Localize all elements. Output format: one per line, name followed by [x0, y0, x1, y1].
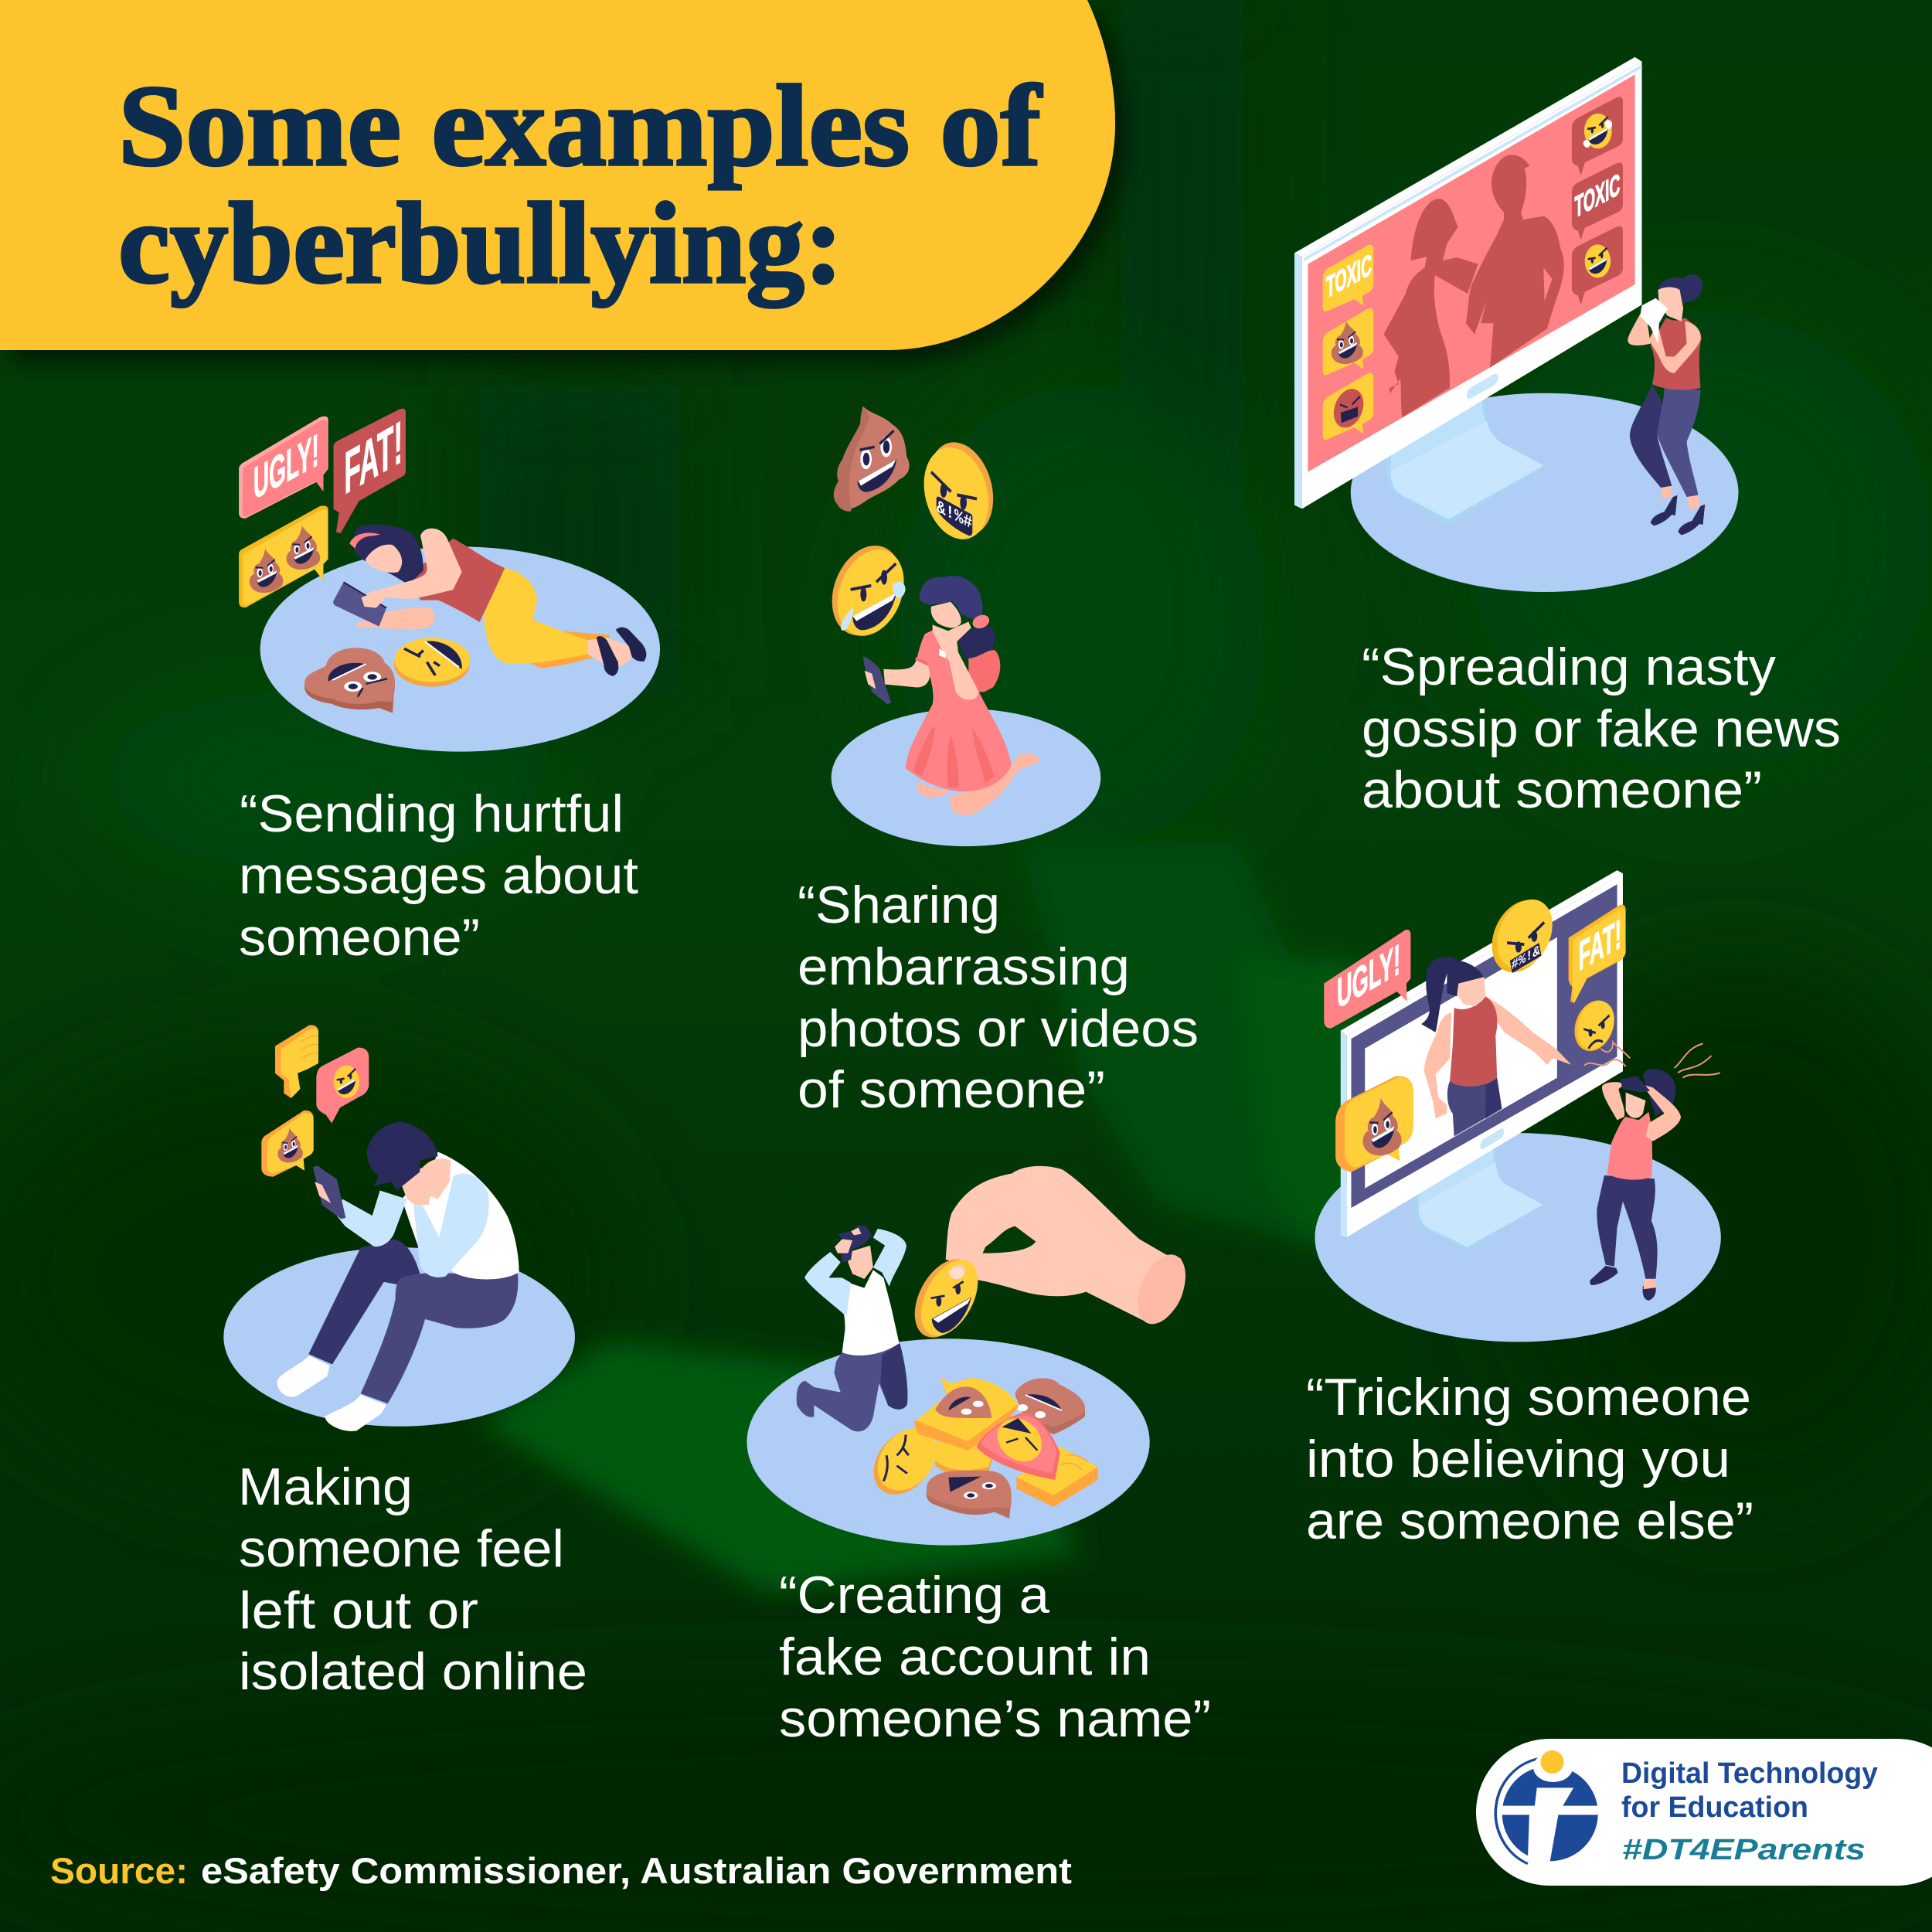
- logo text: #DT4EParents: [1622, 1834, 1866, 1866]
- illustration: tricking someone, monitor and woman: [1315, 870, 1721, 1342]
- emoji: angry coin with censored mouth: [912, 430, 1005, 552]
- caption: spreading gossip: gossip or fake news: [1362, 699, 1841, 758]
- emoji: laughing coin with tears: [818, 529, 917, 651]
- emoji: angry coin with censored mouth: [1480, 887, 1564, 985]
- pink emoji bubble: [316, 1048, 369, 1124]
- logo icon: [1495, 1750, 1598, 1864]
- emoji: angry face: [1566, 992, 1622, 1060]
- woman lying on floor: [333, 525, 646, 676]
- caption: embarrassing photos: of someone”: [798, 1060, 1105, 1119]
- logo text: for Education: [1621, 1791, 1808, 1824]
- kneeling man: [797, 1225, 907, 1431]
- emoji: poop: [834, 406, 910, 512]
- speech bubble: UGLY: [239, 417, 328, 519]
- title: cyberbullying:: [118, 179, 843, 308]
- emoji coin being held: [903, 1252, 989, 1345]
- caption: left out: someone feel: [239, 1519, 564, 1578]
- monitor stand: [1386, 393, 1543, 525]
- illustration: embarrassing photos, kneeling girl: [818, 406, 1100, 846]
- crying woman with tissue: [1628, 274, 1705, 535]
- left column speech bubbles: [1323, 245, 1373, 440]
- illustration: spreading gossip, large monitor: [1294, 57, 1739, 592]
- logo panel: [1476, 1739, 1932, 1886]
- caption: tricking someone: are someone else”: [1306, 1492, 1753, 1550]
- illustration: fake account, hand dropping emoji: [747, 1166, 1195, 1546]
- caption: fake account: [779, 1566, 1211, 1748]
- emoji on floor: poop: [304, 648, 395, 713]
- woman on screen pointing: [1421, 957, 1571, 1136]
- poop bubble: [261, 1111, 314, 1177]
- thumbs-down bubble: [275, 1025, 318, 1098]
- speech bubble: UGLY: UGLY!: [1337, 934, 1400, 1018]
- distressed woman: [1590, 1069, 1681, 1301]
- caption: tricking someone: into believing you: [1306, 1430, 1730, 1488]
- title banner: [0, 0, 1115, 350]
- caption: embarrassing photos: [798, 876, 1199, 1119]
- emoji on floor: laughing coin: [394, 638, 470, 687]
- caption: fake account: fake account in: [779, 1628, 1151, 1686]
- speech bubble: FAT: [334, 408, 406, 533]
- left column speech bubbles: TOXIC: [1326, 247, 1372, 305]
- caption: hurtful messages: someone”: [239, 908, 480, 967]
- speech bubble: UGLY: [1324, 930, 1410, 1029]
- caption: tricking someone: [1306, 1368, 1753, 1550]
- caption: fake account: someone’s name”: [779, 1689, 1211, 1748]
- caption: left out: [238, 1458, 587, 1701]
- caption: embarrassing photos: photos or videos: [798, 999, 1199, 1058]
- caption: fake account: “Creating a: [779, 1566, 1049, 1624]
- speech bubble: two poop emojis: [239, 505, 328, 607]
- monitor stand: [1414, 1143, 1543, 1251]
- caption: left out: isolated online: [239, 1642, 587, 1701]
- monitor with pink screen: [1294, 57, 1642, 509]
- source credit: eSafety Commissioner, Australian Government: [201, 1850, 1072, 1891]
- title: Some examples of: [118, 62, 1043, 190]
- illustration: hurtful messages, woman lying down: FAT!: [344, 408, 403, 508]
- caption: spreading gossip: [1362, 638, 1841, 819]
- caption: spreading gossip: about someone”: [1362, 760, 1762, 819]
- caption: hurtful messages: [239, 784, 638, 967]
- illustration: hurtful messages, woman lying down: [239, 408, 660, 752]
- caption: left out: left out or: [239, 1581, 478, 1640]
- speech bubble: FAT: [1569, 905, 1626, 1003]
- silhouettes of two people: [1384, 155, 1564, 417]
- caption: embarrassing photos: embarrassing: [798, 937, 1130, 996]
- caption: hurtful messages: “Sending hurtful: [240, 784, 624, 843]
- caption: hurtful messages: messages about: [239, 846, 638, 905]
- pile of emojis: [862, 1378, 1098, 1519]
- title: [118, 62, 1043, 308]
- illustration: hurtful messages, woman lying down: UGLY!: [253, 424, 319, 510]
- right column speech bubbles: [1572, 97, 1623, 304]
- emoji: angry coin with censored mouth: &!%#: [937, 496, 972, 534]
- kneeling girl in pink dress: [863, 576, 1041, 815]
- caption: embarrassing photos: “Sharing: [798, 876, 1000, 934]
- stress squiggles: [1584, 1042, 1720, 1078]
- large hand: [946, 1166, 1195, 1329]
- source credit: Source:: [50, 1850, 188, 1891]
- seated person: [277, 1122, 519, 1431]
- speech bubble: FAT: FAT!: [1579, 910, 1621, 981]
- monitor with video call: [1341, 870, 1623, 1237]
- logo text: Digital Technology: [1621, 1757, 1878, 1790]
- caption: tricking someone: “Tricking someone: [1306, 1368, 1751, 1427]
- speech bubble: poop: [1335, 1076, 1413, 1172]
- emoji: angry coin with censored mouth: #%!&: [1512, 943, 1540, 975]
- logo text: [1621, 1757, 1878, 1866]
- right column speech bubbles: TOXIC: [1574, 167, 1620, 225]
- caption: spreading gossip: “Spreading nasty: [1362, 638, 1776, 696]
- caption: left out: Making: [238, 1458, 413, 1516]
- illustration: left out, seated person: [223, 1025, 575, 1431]
